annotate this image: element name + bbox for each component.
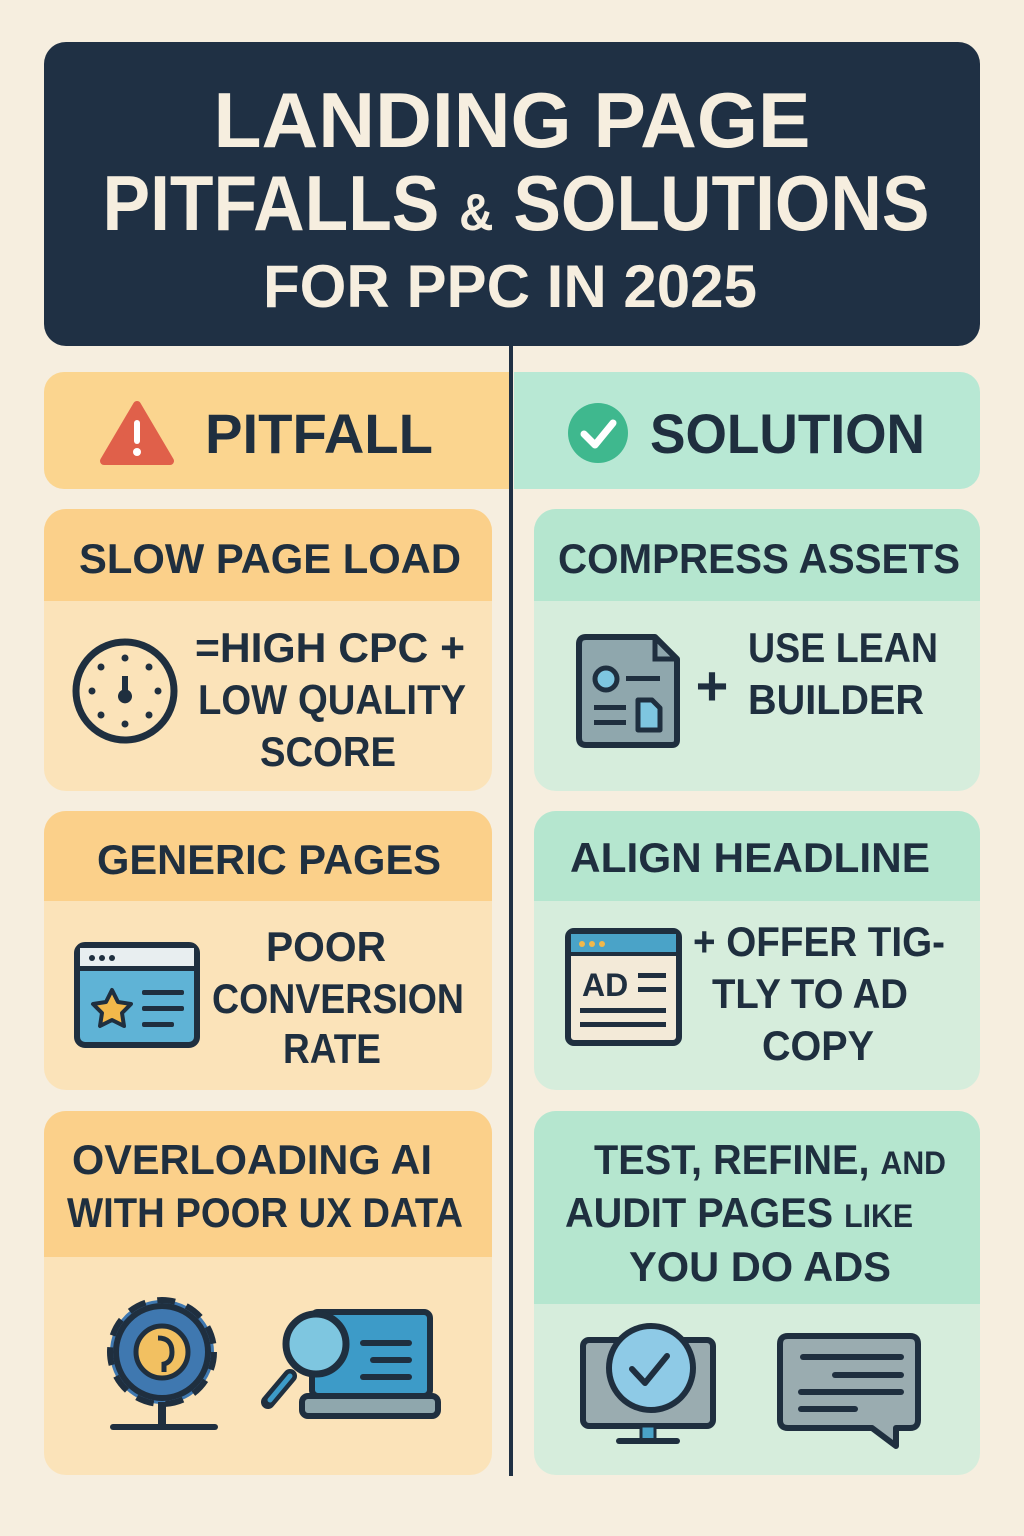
icon: clock <box>76 642 174 740</box>
icon: file <box>579 637 677 745</box>
icon: monitor with check <box>583 1326 713 1444</box>
panel: slow page load: SLOW PAGE LOAD <box>79 535 461 582</box>
panel: test refine audit <box>534 1111 980 1475</box>
icon: browser with star <box>77 945 197 1045</box>
pitfall header: PITFALL <box>205 402 433 465</box>
pitfall header <box>44 372 510 489</box>
icon: ad page: AD <box>582 967 628 1003</box>
panel: align headline: ALIGN HEADLINE <box>570 834 930 881</box>
panel: compress assets: + <box>696 654 728 717</box>
title banner: LANDING PAGE <box>214 76 810 164</box>
panel: overloading AI: WITH POOR UX DATA <box>67 1189 463 1236</box>
panel: slow page load: =HIGH CPC + <box>195 624 465 671</box>
icon: warning <box>104 405 170 461</box>
title banner <box>44 42 980 346</box>
panel: overloading AI: OVERLOADING AI <box>72 1136 432 1183</box>
panel: generic pages <box>44 811 492 1090</box>
panel: slow page load: LOW QUALITY <box>198 676 466 723</box>
panel: test refine audit: AUDIT PAGES LIKE <box>565 1189 913 1236</box>
solution header: SOLUTION <box>650 402 925 465</box>
icon: ad page <box>568 931 679 1043</box>
panel: generic pages: RATE <box>283 1025 381 1072</box>
panel: slow page load <box>44 509 492 791</box>
panel: slow page load: SCORE <box>260 728 396 775</box>
panel: generic pages: CONVERSION <box>212 975 464 1022</box>
panel: compress assets: USE LEAN <box>748 624 938 671</box>
icon: magnifier on laptop <box>268 1312 438 1416</box>
panel: align headline: + OFFER TIG- <box>693 918 945 965</box>
title banner: PITFALLS & SOLUTIONS <box>102 159 930 247</box>
divider line <box>509 346 513 1476</box>
panel: align headline <box>534 811 980 1090</box>
panel: compress assets: COMPRESS ASSETS <box>558 535 960 582</box>
icon: check circle <box>568 403 628 463</box>
panel: compress assets: BUILDER <box>748 676 924 723</box>
panel: test refine audit: YOU DO ADS <box>629 1243 891 1290</box>
panel: align headline: COPY <box>762 1022 874 1069</box>
panel: generic pages: POOR <box>266 923 386 970</box>
panel: overloading AI <box>44 1111 492 1475</box>
icon: gear with head <box>110 1300 218 1430</box>
panel: generic pages: GENERIC PAGES <box>97 836 441 883</box>
title banner: FOR PPC IN 2025 <box>263 253 757 320</box>
panel: test refine audit: TEST, REFINE, AND <box>594 1136 946 1183</box>
solution header <box>514 372 980 489</box>
panel: compress assets <box>534 509 980 791</box>
panel: align headline: TLY TO AD <box>712 970 908 1017</box>
icon: speech bubble <box>780 1336 918 1446</box>
